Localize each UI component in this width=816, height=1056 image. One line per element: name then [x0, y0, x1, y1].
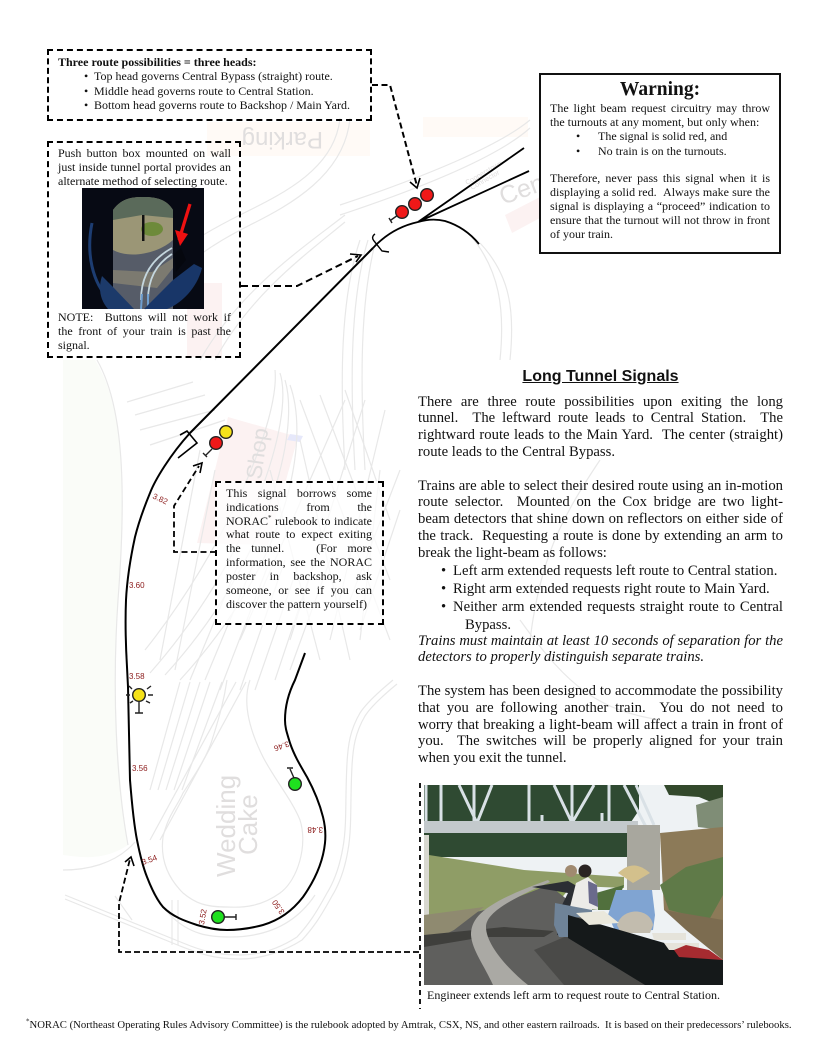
- body paragraph 2: route selector. Mounted on the Cox bridge are two light-: [418, 494, 783, 510]
- note text: [58, 310, 231, 352]
- callout: three heads: Three route possibilities = three heads:: [58, 55, 257, 69]
- callout: push button box: [47, 141, 241, 358]
- warning box: [539, 73, 781, 254]
- faint map labels: Central: [495, 157, 581, 211]
- faint green map area: [63, 360, 128, 857]
- callout: three heads: Top head governs Central Bypass (straight) route.: [94, 69, 333, 83]
- milepost labels: 3.48: [307, 825, 323, 834]
- grass: [429, 855, 624, 925]
- warning box: No train is on the turnouts.: [598, 144, 727, 158]
- push button text: [58, 146, 231, 188]
- faint background track plan: [63, 118, 660, 959]
- note text: NOTE: Buttons will not work if: [58, 310, 231, 324]
- ballast: [424, 885, 674, 985]
- body paragraph 2: beam detectors that shine down on reflectors on either side of: [418, 511, 783, 527]
- body paragraph 3: when you exit the tunnel.: [418, 750, 567, 766]
- warning text: [550, 101, 770, 129]
- abutment: [627, 825, 660, 890]
- milepost labels: 3.82: [151, 492, 170, 507]
- body paragraph 1: tunnel. The leftward route leads to Central Station. The: [418, 410, 783, 426]
- body paragraph 2: Trains are able to select their desired route using an in-motion: [418, 478, 783, 494]
- route list: Right arm extended requests right route to Main Yard.: [453, 581, 770, 597]
- body paragraph 3: [418, 683, 783, 766]
- body paragraph 1: route leads to the Central Bypass.: [418, 444, 615, 460]
- faint map labels: Parking: [242, 126, 323, 153]
- milepost labels: 3.58: [129, 672, 145, 681]
- callout: NORAC signal note: discover the pattern yourself): [226, 597, 367, 611]
- main track line: [126, 248, 373, 930]
- body paragraph 3: worry that breaking a light-beam will affect a train in front of: [418, 716, 783, 732]
- route list: Left arm extended requests left route to Central station.: [453, 563, 777, 579]
- faint map labels: [211, 126, 581, 877]
- callout: NORAC signal note: the tunnel. (For more: [226, 541, 372, 555]
- bridge truss: [426, 785, 654, 827]
- note text: the front of your train is past the: [58, 324, 231, 338]
- callout: NORAC signal note: poster in backshop, ask: [226, 569, 372, 583]
- callout leader: to three-head signal: [372, 85, 420, 188]
- body paragraph 2: the track. Requesting a route is done by extending an arm to: [418, 528, 783, 544]
- photo: engineer on train: [424, 785, 723, 985]
- callout leader: photo to track: [119, 783, 420, 1009]
- milepost labels: 3.50: [270, 898, 287, 916]
- callout: three heads: [47, 49, 372, 121]
- faint map labels: Wedding: [211, 775, 241, 877]
- italic note: [418, 633, 783, 665]
- callout: NORAC signal note: [215, 481, 384, 625]
- faint map labels: Cake: [233, 794, 263, 855]
- callout: NORAC signal note: This signal borrows some: [226, 486, 372, 500]
- photo caption: Engineer extends left arm to request route to Central Station.: [427, 988, 720, 1002]
- faint map labels: Shop: [241, 426, 273, 481]
- callout: three heads: Bottom head governs route to Backshop / Main Yard.: [94, 98, 350, 112]
- warning box: of your train.: [550, 227, 613, 241]
- faint map labels: Connector: [470, 169, 502, 192]
- italic note: detectors to properly distinguish separate trains.: [418, 649, 704, 665]
- photo: tunnel portal: [82, 188, 204, 309]
- body paragraph 2: break the light-beam as follows:: [418, 545, 607, 561]
- warning box: Therefore, never pass this signal when it is: [550, 171, 770, 185]
- push button text: just inside tunnel portal provides an: [58, 160, 231, 174]
- callout leader: to two-head signal: [174, 463, 216, 552]
- turnout bracket: upper: [373, 234, 389, 252]
- warning text: the turnouts at any moment, but only when:: [550, 115, 759, 129]
- route list: Bypass.: [465, 617, 511, 633]
- train: [568, 915, 723, 985]
- route list: •: [441, 581, 446, 597]
- warning box: The signal is solid red, and: [598, 129, 727, 143]
- callout: three heads: •: [84, 98, 88, 112]
- milepost labels: 3.46: [272, 739, 290, 753]
- callout leader: to upper turnout: [241, 254, 361, 286]
- route list: •: [441, 563, 446, 579]
- warning box: signal is displaying a “proceed” indication to: [550, 199, 770, 213]
- callout: NORAC signal note: NORAC* rulebook to indicate: [226, 514, 372, 528]
- warning box: ensure that the turnout will not throw in front: [550, 213, 770, 227]
- route list: Neither arm extended requests straight route to Central: [453, 599, 783, 615]
- bracket: tunnel exit: [178, 431, 197, 458]
- signal: two heads: [203, 426, 232, 457]
- warning box: •: [576, 144, 580, 158]
- body paragraph 3: The system has been designed to accommodate the possibility: [418, 683, 783, 699]
- signal: green lower: [212, 911, 236, 923]
- milepost labels: 3.56: [132, 764, 148, 773]
- warning text: The light beam request circuitry may throw: [550, 101, 770, 115]
- right hillside: [660, 827, 723, 945]
- warning box: displaying a solid red. Always make sure the: [550, 185, 770, 199]
- warning box: •: [576, 129, 580, 143]
- milepost labels: [129, 492, 323, 925]
- milepost labels: 3.52: [197, 908, 209, 925]
- callout: NORAC signal note: someone, or see if you can: [226, 583, 372, 597]
- push button text: alternate method of selecting route.: [58, 174, 228, 188]
- heading: Long Tunnel Signals: [522, 368, 679, 385]
- push button text: Push button box mounted on wall: [58, 146, 231, 160]
- route list: [441, 563, 783, 633]
- milepost labels: 3.60: [129, 581, 145, 590]
- footnote: *NORAC (Northeast Operating Rules Advisory Committee) is the rulebook adopted by Amtrak, CSX, NS, and other eastern railroads. It is based on their predecessors’ rulebooks.: [26, 1017, 792, 1031]
- signal: green upper: [287, 768, 301, 790]
- men: [532, 881, 582, 935]
- faint map colour blocks: [187, 197, 540, 545]
- warning title: Warning:: [620, 79, 700, 100]
- milepost labels: 3.54: [141, 853, 159, 867]
- body paragraph 1: rightward route leads to the Main Yard. The center (straight): [418, 427, 783, 443]
- upper turnout tracks: [373, 148, 529, 248]
- body paragraph 3: that you are following another train. You do not need to: [418, 700, 783, 716]
- body paragraph 1: There are three route possibilities upon exiting the long: [418, 394, 783, 410]
- track: [471, 880, 550, 985]
- italic note: Trains must maintain at least 10 seconds of separation for the: [418, 633, 783, 649]
- trees: [424, 785, 639, 857]
- faint map labels: Cooperstown: [464, 160, 504, 187]
- shadow: [534, 935, 645, 985]
- callout: NORAC signal note: information, see the NORAC: [226, 555, 372, 569]
- callout: three heads: •: [84, 69, 88, 83]
- route list: •: [441, 599, 446, 615]
- callout: NORAC signal note: what route to expect exiting: [226, 527, 372, 541]
- body paragraph 2: [418, 478, 783, 561]
- body paragraph 3: you. The switches will be properly aligned for your train: [418, 733, 783, 749]
- signal: flashing yellow: [126, 686, 153, 713]
- woman: [608, 890, 655, 933]
- callout: NORAC signal note: indications from the: [226, 500, 372, 514]
- body paragraph 1: [418, 394, 783, 460]
- note text: signal.: [58, 338, 90, 352]
- callout: three heads: •: [84, 84, 88, 98]
- callout: three heads: Middle head governs route to Central Station.: [94, 84, 314, 98]
- signal: three heads: [389, 189, 433, 223]
